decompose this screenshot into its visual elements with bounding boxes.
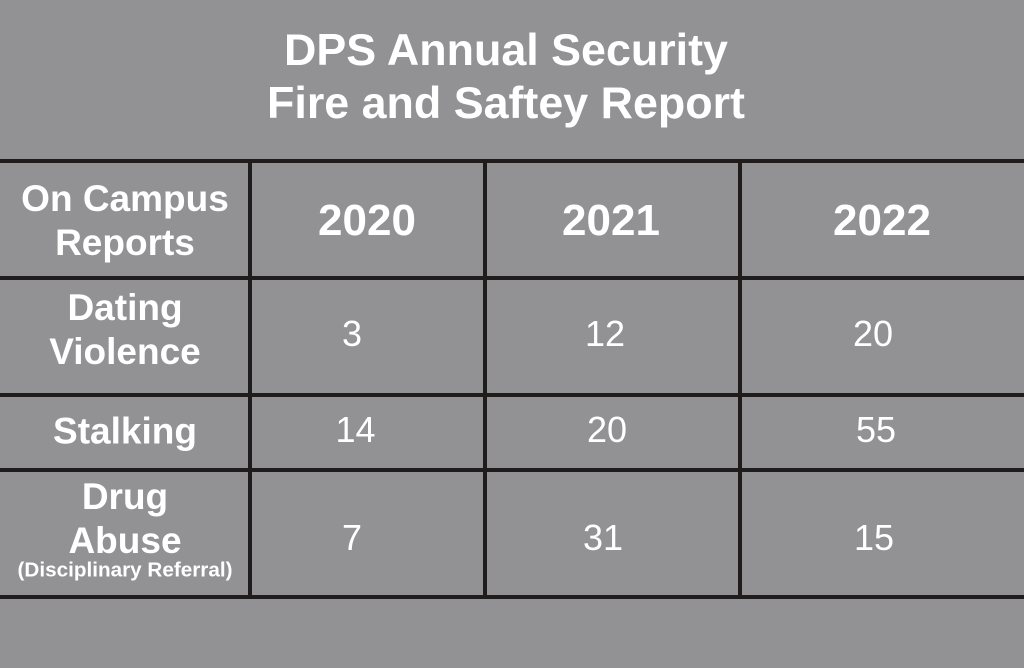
row label: drug abuse: Abuse [68,520,182,561]
year 2021: 2021 [562,196,660,245]
value: stalking 2021: 20 [587,409,627,450]
row sublabel: disciplinary referral: (Disciplinary Referral) [18,559,232,582]
value: drug abuse 2022: 15 [854,517,894,558]
value: dating violence 2020: 3 [342,313,362,354]
title: DPS Annual Security [284,25,728,75]
value: stalking 2020: 14 [335,409,376,450]
row label: dating violence: Dating [67,287,183,328]
year 2020: 2020 [318,196,416,245]
title [267,25,745,128]
title: Fire and Saftey Report [267,78,745,128]
value: stalking 2022: 55 [856,409,896,450]
row label: drug abuse: Drug [82,476,168,517]
row label: drug abuse [68,476,182,561]
value: dating violence 2021: 12 [585,313,625,354]
row header: on campus reports: On Campus [21,178,229,219]
value: drug abuse 2020: 7 [342,517,362,558]
row label: dating violence [49,287,201,372]
value: drug abuse 2021: 31 [583,517,623,558]
row label: stalking: Stalking [53,410,197,452]
value: dating violence 2022: 20 [853,313,893,354]
row label: dating violence: Violence [49,331,201,372]
table [0,159,1024,599]
row header: on campus reports [21,178,229,263]
year 2022: 2022 [833,196,931,245]
row header: on campus reports: Reports [55,222,195,263]
